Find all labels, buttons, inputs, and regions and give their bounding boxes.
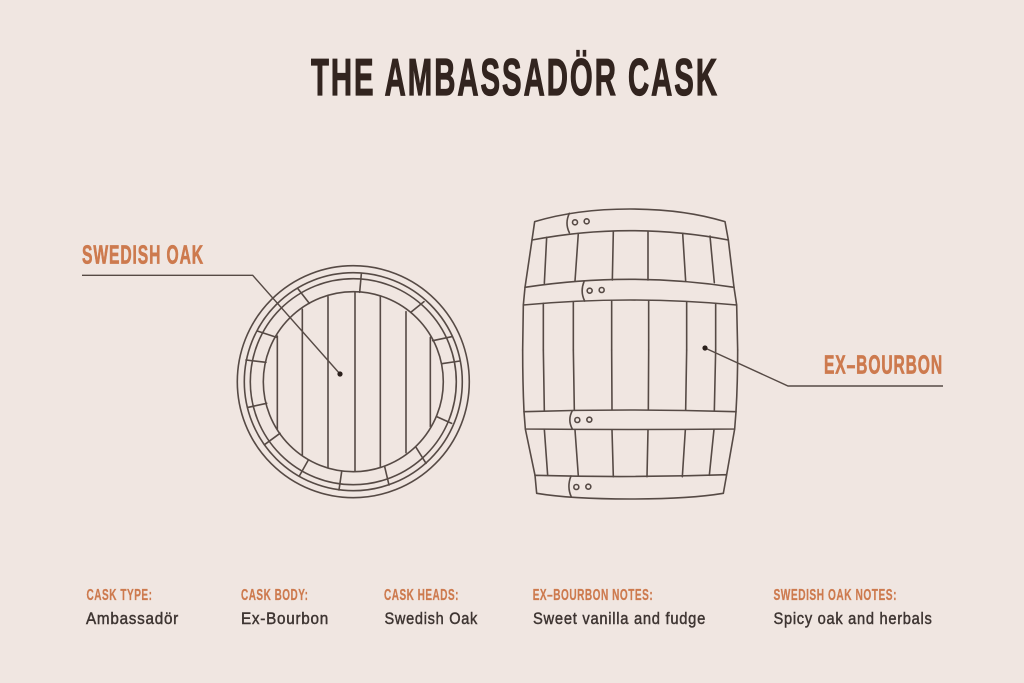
info: cask type	[86, 587, 179, 628]
info: ex-bourbon notes: EX–BOURBON NOTES:	[533, 587, 653, 604]
info: swedish oak notes: SWEDISH OAK NOTES:	[774, 587, 897, 604]
info: swedish oak notes: Spicy oak and herbals	[774, 610, 932, 628]
callout: Swedish Oak	[82, 240, 343, 377]
info: ex-bourbon notes: Sweet vanilla and fudge	[533, 610, 706, 628]
info: ex-bourbon notes	[533, 587, 706, 628]
callout: Ex-Bourbon	[702, 345, 943, 386]
info: cask type: CASK TYPE:	[86, 587, 152, 604]
info: cask body	[241, 587, 329, 628]
info: cask type: Ambassadör	[86, 610, 179, 628]
info: cask body: Ex-Bourbon	[241, 610, 329, 628]
illustration: cask head (top view)	[237, 266, 469, 498]
title: THE AMBASSADÖR CASK	[311, 48, 719, 106]
info: cask heads: CASK HEADS:	[384, 587, 459, 604]
info: cask body: CASK BODY:	[241, 587, 308, 604]
callout: Swedish Oak: SWEDISH OAK	[82, 240, 204, 270]
info: cask heads: Swedish Oak	[384, 610, 478, 628]
info: swedish oak notes	[774, 587, 932, 628]
info: cask heads	[384, 587, 478, 628]
illustration: cask body (side view)	[523, 209, 738, 499]
callout: Ex-Bourbon: EX–BOURBON	[824, 350, 943, 380]
